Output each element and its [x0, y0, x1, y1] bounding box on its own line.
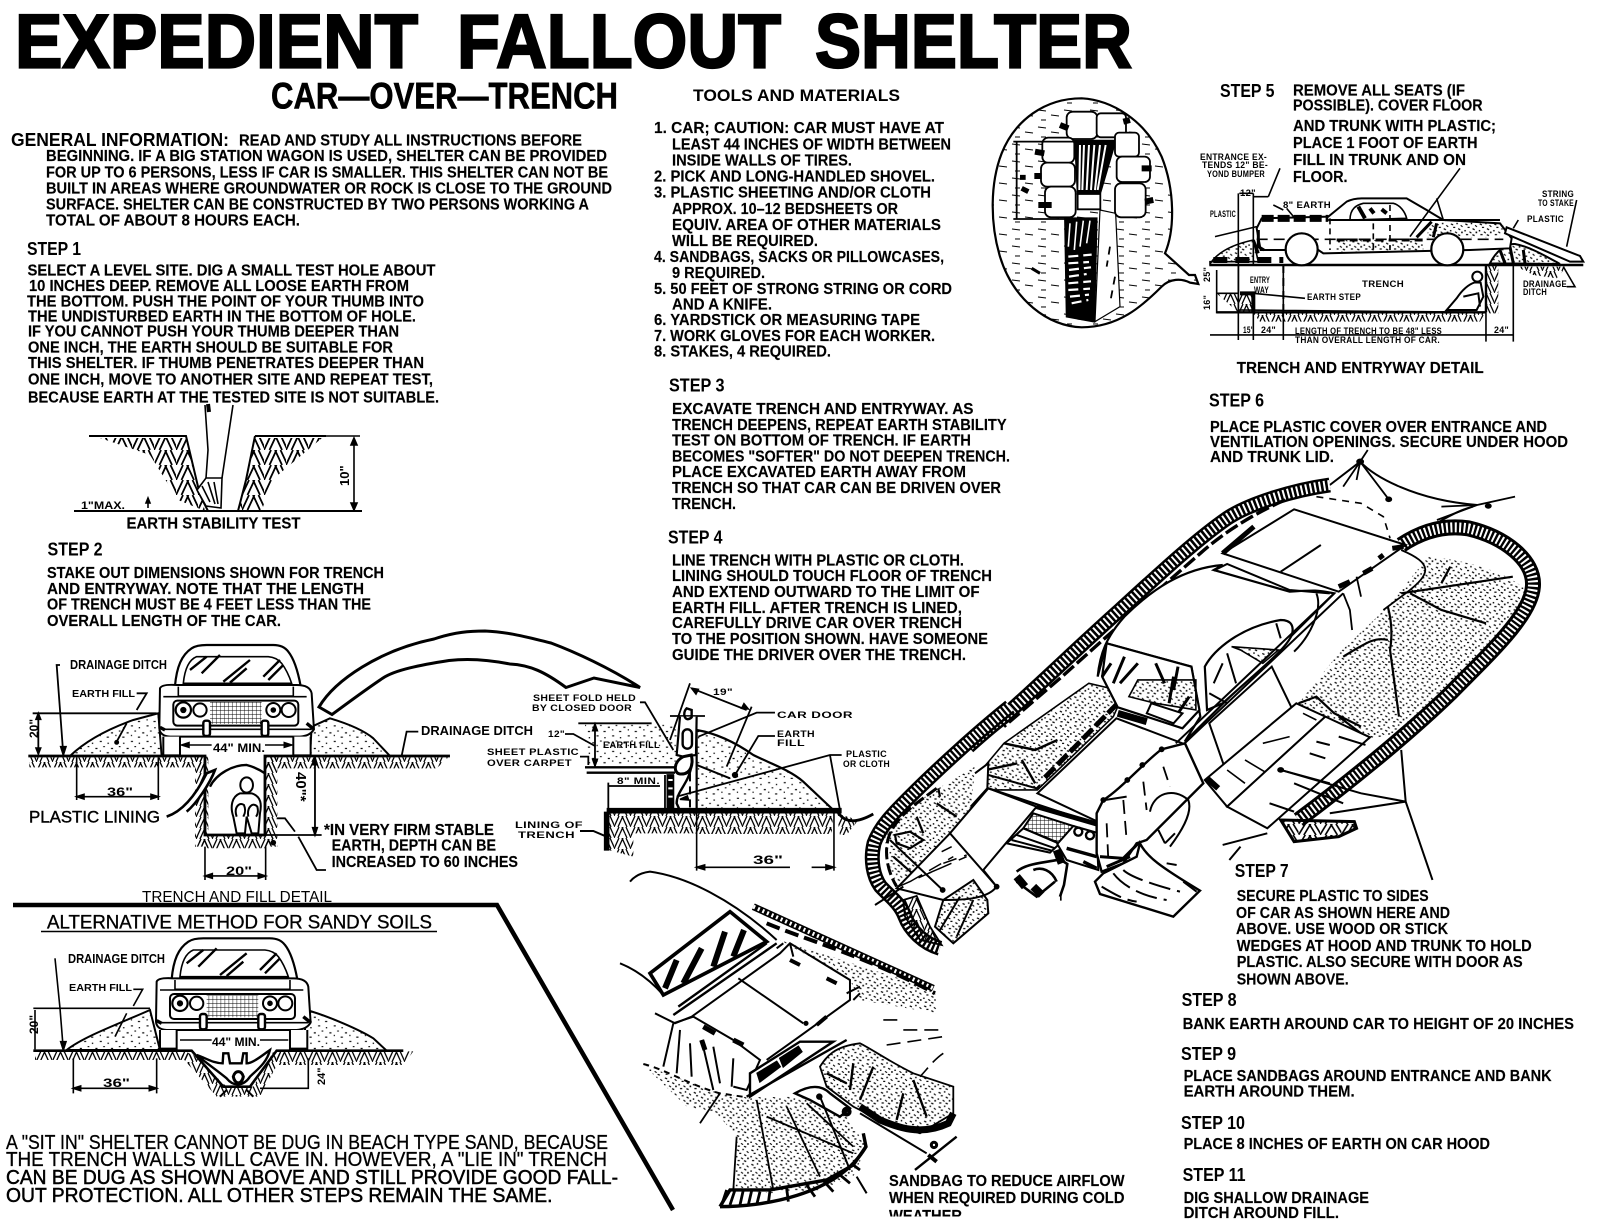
step 4 text: LINING SHOULD TOUCH FLOOR OF TRENCH: [672, 568, 992, 585]
tools and materials list: APPROX. 10–12 BEDSHEETS OR: [672, 201, 898, 218]
car roof: [1098, 564, 1334, 742]
steps 8 to 11 text: STEP 11: [1183, 1165, 1246, 1185]
diagram: earth stability test: 1"MAX.: [81, 500, 125, 512]
diagram: trench and fill detail: [27, 645, 533, 880]
alternative method heading: ALTERNATIVE METHOD FOR SANDY SOILS: [47, 913, 432, 934]
general information text: FOR UP TO 6 PERSONS, LESS IF CAR IS SMALLER. THIS SHELTER CAN NOT BE: [46, 164, 608, 182]
step 4 text: LINE TRENCH WITH PLASTIC OR CLOTH.: [672, 552, 964, 569]
car hood: [1037, 718, 1182, 822]
caption: sandbag note: [880, 1173, 1125, 1225]
diagram: trench and entryway detail: TO STAKE: [1538, 198, 1574, 208]
diagram: earth stability test: 10": [337, 465, 352, 486]
diagram: lie-in trench for sandy soils: DRAINAGE DITCH: [68, 951, 165, 966]
diagram: trench and entryway detail: YOND BUMPER: [1207, 169, 1265, 179]
step 3 text: PLACE EXCAVATED EARTH AWAY FROM: [672, 464, 966, 481]
step 5 text: FLOOR.: [1293, 169, 1348, 186]
diagram: trench and fill detail: DRAINAGE DITCH: [70, 657, 167, 672]
diagram: trench and fill detail: 20": [226, 864, 252, 878]
step 3 text: BECOMES "SOFTER" DO NOT DEEPEN TRENCH.: [672, 448, 1010, 465]
earth cliff at hood front: [988, 775, 1040, 788]
step 7 text: SHOWN ABOVE.: [1237, 972, 1349, 989]
diagram: lie-in trench for sandy soils: 24": [316, 1068, 328, 1085]
diagram: trench and entryway detail: TENDS 12" BE-: [1202, 160, 1268, 170]
steps 8 to 11 text: BANK EARTH AROUND CAR TO HEIGHT OF 20 INCHES: [1183, 1016, 1574, 1033]
tools and materials list: 5. 50 FEET OF STRONG STRING OR CORD: [654, 281, 952, 298]
plastic strip below hood: [897, 788, 1037, 900]
step 5 text: REMOVE ALL SEATS (IF: [1293, 83, 1465, 100]
tools and materials heading: TOOLS AND MATERIALS: [693, 86, 900, 105]
step 4 text: TO THE POSITION SHOWN. HAVE SOMEONE: [672, 631, 988, 648]
step 1 text: STEP 1: [27, 239, 81, 259]
diagram: lie-in trench for sandy soils: [27, 938, 413, 1097]
sandy soils explanatory text: THE TRENCH WALLS WILL CAVE IN. HOWEVER, A "LIE IN" TRENCH: [6, 1149, 607, 1171]
diagram: trench and fill detail: 40"*: [292, 772, 309, 802]
trunk lid: [1223, 509, 1406, 592]
step 5 text: [1220, 81, 1496, 186]
diagram: trench and entryway detail: PLASTIC: [1210, 209, 1236, 219]
diagram: trench and entryway detail: PLASTIC: [1527, 214, 1564, 224]
step 1 text: ONE INCH, THE EARTH SHOULD BE SUITABLE FOR: [28, 340, 393, 357]
caption: trench and fill detail: TRENCH AND FILL DETAIL: [142, 889, 332, 906]
car interior seats: [1102, 643, 1199, 728]
general information text: BEGINNING. IF A BIG STATION WAGON IS USED, SHELTER CAN BE PROVIDED: [46, 148, 607, 165]
step 1 text: [27, 239, 439, 406]
diagram: car door and earth fill detail: EARTH: [777, 729, 815, 739]
diagram: trench and entryway detail: EARTH STEP: [1307, 292, 1361, 302]
diagram: trench and entryway detail: 16": [1202, 295, 1212, 310]
right earth bank band: [1281, 527, 1533, 842]
diagram: car door and earth fill detail: 8" MIN.: [617, 776, 660, 786]
diagram: trench and entryway detail: LENGTH OF TRENCH TO BE 48" LESS: [1295, 326, 1442, 336]
step 3 text: [669, 376, 1010, 513]
step 7 text: OF CAR AS SHOWN HERE AND: [1236, 905, 1450, 922]
diagram: trench and fill detail: PLASTIC LINING: [29, 808, 160, 826]
diagram: main isometric car in shelter: [872, 450, 1533, 948]
grille: [1007, 813, 1098, 870]
diagram: car door and earth fill detail: 19": [713, 687, 733, 697]
step 2 text: [47, 540, 384, 630]
subtitle: CAR—OVER—TRENCH: [271, 76, 618, 116]
step 4 text: CAREFULLY DRIVE CAR OVER TRENCH: [672, 615, 962, 632]
sandy soils explanatory text: [6, 1132, 618, 1207]
steps 8 to 11 text: STEP 10: [1181, 1113, 1245, 1133]
step 5 text: POSSIBLE). COVER FLOOR: [1293, 98, 1483, 115]
caption: sandbag note: SANDBAG TO REDUCE AIRFLOW: [889, 1173, 1125, 1190]
left earth bank band: [968, 485, 1330, 747]
diagram: trench and entryway detail: ENTRANCE EX-: [1200, 152, 1267, 162]
step 6 text: PLACE PLASTIC COVER OVER ENTRANCE AND: [1210, 419, 1547, 436]
plastic sheet held by door: [1097, 743, 1203, 872]
sandy soils explanatory text: CAN BE DUG AS SHOWN ABOVE AND STILL PROVIDE GOOD FALL-: [6, 1167, 618, 1189]
title: EXPEDIENT: [15, 0, 418, 84]
tie cords and trunk wedges: [1223, 750, 1432, 880]
step 4 text: STEP 4: [668, 528, 722, 548]
general information text: [11, 130, 612, 229]
steps 8 to 11 text: [1181, 990, 1574, 1222]
tools and materials list: LEAST 44 INCHES OF WIDTH BETWEEN: [672, 136, 951, 154]
steps 8 to 11 text: STEP 9: [1181, 1044, 1236, 1064]
diagram: trench and entryway detail: WAY: [1254, 285, 1269, 295]
general information text: GENERAL INFORMATION:: [11, 130, 229, 150]
step 2 text: AND ENTRYWAY. NOTE THAT THE LENGTH: [47, 581, 364, 598]
step 3 text: STEP 3: [669, 376, 724, 396]
step 2 text: OF TRENCH MUST BE 4 FEET LESS THAN THE: [47, 597, 371, 614]
diagram: trench and fill detail: DRAINAGE DITCH: [421, 723, 533, 738]
general information text: BUILT IN AREAS WHERE GROUNDWATER OR ROCK IS CLOSE TO THE GROUND: [46, 181, 612, 198]
caption: sandbag note: WHEN REQUIRED DURING COLD: [889, 1190, 1124, 1207]
steps 8 to 11 text: DIG SHALLOW DRAINAGE: [1184, 1190, 1369, 1207]
plastic flap near trunk: [1343, 550, 1425, 630]
earth fill, hood band: [982, 683, 1124, 790]
step 1 text: ONE INCH, MOVE TO ANOTHER SITE AND REPEAT TEST,: [28, 372, 433, 389]
lower front of car, banks, sheet and worker: [872, 707, 1203, 948]
sandy soils explanatory text: OUT PROTECTION. ALL OTHER STEPS REMAIN THE SAME.: [6, 1185, 552, 1207]
step 4 text: EARTH FILL. AFTER TRENCH IS LINED,: [672, 600, 962, 617]
steps 8 to 11 text: PLACE 8 INCHES OF EARTH ON CAR HOOD: [1184, 1136, 1490, 1153]
diagram: sandbag entrance detail bubble: [993, 98, 1198, 327]
diagram: lie-in trench for sandy soils: EARTH FILL: [69, 983, 132, 994]
steps 8 to 11 text: DITCH AROUND FILL.: [1184, 1205, 1339, 1222]
step 7 text: STEP 7: [1235, 861, 1289, 881]
diagram: earth stability test: [74, 404, 362, 512]
diagram: lie-in trench for sandy soils: 20": [27, 1015, 41, 1034]
diagram: car door and earth fill detail: EARTH FILL: [603, 740, 660, 750]
door and side panel: [1205, 667, 1325, 807]
step 5 text: PLACE 1 FOOT OF EARTH: [1293, 135, 1478, 152]
diagram: car door and earth fill detail: OR CLOTH: [843, 759, 890, 769]
tip of bank: [903, 880, 988, 945]
tools and materials list: WILL BE REQUIRED.: [672, 233, 818, 250]
step 7 text: [1235, 861, 1532, 989]
step 4 text: [668, 528, 992, 664]
step 4 text: GUIDE THE DRIVER OVER THE TRENCH.: [672, 647, 966, 664]
step 6 text: [1209, 390, 1568, 466]
diagram: car door and earth fill detail: FILL: [777, 738, 805, 748]
diagram: trench and entryway detail: 8" EARTH: [1283, 200, 1331, 210]
caption: earth stability test: EARTH STABILITY TEST: [126, 516, 301, 533]
step 6 text: VENTILATION OPENINGS. SECURE UNDER HOOD: [1210, 434, 1568, 451]
plastic cover at trunk: [1294, 450, 1515, 545]
diagram: trench and entryway detail: TRENCH: [1362, 279, 1404, 289]
diagram: trench and entryway detail: 15": [1243, 325, 1254, 335]
diagram: car door and earth fill detail: LINING OF: [515, 820, 583, 830]
open cab window: [1205, 620, 1293, 710]
step 7 text: ABOVE. USE WOOD OR STICK: [1236, 921, 1448, 938]
car side line: [1176, 593, 1343, 743]
tools and materials list: 2. PICK AND LONG-HANDLED SHOVEL.: [654, 168, 935, 186]
step 3 text: TRENCH DEEPENS, REPEAT EARTH STABILITY: [672, 417, 1007, 434]
tools and materials list: AND A KNIFE.: [672, 297, 772, 314]
step 2 text: OVERALL LENGTH OF THE CAR.: [47, 613, 281, 630]
general information text: SURFACE. SHELTER CAN BE CONSTRUCTED BY TWO PERSONS WORKING A: [46, 197, 589, 214]
general information text: READ AND STUDY ALL INSTRUCTIONS BEFORE: [239, 132, 582, 150]
diagram: car door and earth fill detail: 12": [548, 729, 565, 739]
general information text: TOTAL OF ABOUT 8 HOURS EACH.: [46, 212, 300, 229]
step 7 text: WEDGES AT HOOD AND TRUNK TO HOLD: [1237, 938, 1532, 955]
tools and materials list: 3. PLASTIC SHEETING AND/OR CLOTH: [654, 185, 931, 202]
title: FALLOUT: [457, 0, 781, 84]
diagram: car door and earth fill detail: SHEET PLASTIC: [487, 747, 579, 757]
diagram: car door and earth fill detail: SHEET FOLD HELD: [533, 693, 636, 703]
step 1 text: SELECT A LEVEL SITE. DIG A SMALL TEST HOLE ABOUT: [28, 263, 436, 280]
tools and materials list: 1. CAR; CAUTION: CAR MUST HAVE AT: [654, 120, 944, 137]
steps 8 to 11 text: EARTH AROUND THEM.: [1184, 1084, 1355, 1100]
diagram: lie-in trench for sandy soils: 36": [103, 1076, 130, 1090]
step 6 text: AND TRUNK LID.: [1210, 449, 1334, 466]
step 2 text: STEP 2: [48, 540, 102, 560]
cord dots: [875, 833, 999, 905]
step 1 text: 10 INCHES DEEP. REMOVE ALL LOOSE EARTH FROM: [29, 278, 409, 295]
step 3 text: TEST ON BOTTOM OF TRENCH. IF EARTH: [672, 433, 971, 450]
step 1 text: IF YOU CANNOT PUSH YOUR THUMB DEEPER THAN: [28, 324, 399, 340]
diagram: trench and fill detail: 20": [27, 719, 41, 738]
earth fill, right bank: [1299, 557, 1526, 740]
diagram: trench and entryway detail: DRAINAGE: [1523, 279, 1567, 289]
diagram: car door and earth fill detail: TRENCH: [518, 830, 575, 840]
diagram: trench and entryway detail: ENTRY: [1250, 275, 1270, 285]
title: [15, 0, 1132, 84]
note: depth in firm earth: [324, 822, 518, 871]
caption: sandbag note: WEATHER: [889, 1208, 962, 1225]
diagram: car door and earth fill detail: BY CLOSED DOOR: [532, 703, 632, 713]
step 7 text: PLASTIC. ALSO SECURE WITH DOOR AS: [1237, 954, 1523, 971]
ground sheet right: [1227, 717, 1370, 828]
left bank stipple: [883, 767, 975, 887]
step 3 text: EXCAVATE TRENCH AND ENTRYWAY. AS: [672, 401, 974, 418]
step 1 text: THIS SHELTER. IF THUMB PENETRATES DEEPER THAN: [28, 355, 424, 372]
front edge of hood: [988, 788, 1097, 824]
tools and materials list: [654, 120, 952, 361]
diagram: car door and earth fill detail: [487, 683, 890, 871]
diagram: trench and entryway detail: 24": [1261, 325, 1276, 335]
diagram: car door and earth fill detail: CAR DOOR: [777, 710, 853, 720]
step 1 text: THE UNDISTURBED EARTH IN THE BOTTOM OF HOLE.: [28, 308, 416, 326]
diagram: trench and entryway detail: DITCH: [1523, 287, 1547, 297]
diagram: trench and entryway detail: STRING: [1542, 189, 1574, 199]
step 1 text: BECAUSE EARTH AT THE TESTED SITE IS NOT SUITABLE.: [28, 390, 439, 406]
wedges along trunk edge: [1223, 527, 1403, 587]
tools and materials list: 7. WORK GLOVES FOR EACH WORKER.: [654, 328, 935, 345]
diagram: trench and fill detail: EARTH FILL: [72, 689, 135, 700]
tools and materials list: 8. STAKES, 4 REQUIRED.: [654, 344, 831, 361]
diagram: car door and earth fill detail: 36": [753, 853, 783, 867]
diagram: car door and earth fill detail: PLASTIC: [846, 749, 887, 759]
tools and materials list: 4. SANDBAGS, SACKS OR PILLOWCASES,: [654, 249, 944, 266]
tools and materials list: INSIDE WALLS OF TIRES.: [672, 152, 852, 169]
worker figure: [1017, 850, 1067, 897]
left bank rope band continuing round the tip: [872, 707, 1010, 948]
curved arrow from trench diagram to door detail: [319, 631, 640, 714]
note: depth in firm earth: INCREASED TO 60 INCHES: [332, 854, 518, 871]
caption: trench and entryway detail: TRENCH AND ENTRYWAY DETAIL: [1237, 360, 1484, 377]
diagram: trench and fill detail: 36": [107, 785, 133, 799]
diagram: lie-in trench for sandy soils: 44" MIN.: [212, 1035, 260, 1049]
diagram: trench and entryway detail: 25": [1202, 267, 1212, 282]
note: depth in firm earth: EARTH, DEPTH CAN BE: [332, 838, 496, 855]
step 4 text: AND EXTEND OUTWARD TO THE LIMIT OF: [672, 584, 980, 601]
tools and materials list: EQUIV. AREA OF OTHER MATERIALS: [672, 217, 941, 234]
diagram: trench and fill detail: 44" MIN.: [213, 741, 265, 755]
step 5 text: STEP 5: [1220, 81, 1274, 101]
ground sheet at door: [1095, 843, 1200, 917]
steps 8 to 11 text: STEP 8: [1182, 990, 1237, 1010]
curved plastic at hood corner: [971, 763, 988, 807]
steps 8 to 11 text: PLACE SANDBAGS AROUND ENTRANCE AND BANK: [1184, 1068, 1552, 1085]
step 5 text: AND TRUNK WITH PLASTIC;: [1293, 118, 1496, 135]
tools and materials list: 9 REQUIRED.: [672, 265, 765, 282]
step 3 text: TRENCH.: [672, 496, 736, 513]
diagram: trench and entryway detail: THAN OVERALL LENGTH OF CAR.: [1295, 335, 1440, 345]
tie knots: [1037, 807, 1097, 824]
tools and materials list: 6. YARDSTICK OR MEASURING TAPE: [654, 312, 920, 329]
step 5 text: FILL IN TRUNK AND ON: [1293, 152, 1466, 169]
title: SHELTER: [815, 0, 1132, 84]
step 6 text: STEP 6: [1209, 390, 1264, 410]
step 7 text: SECURE PLASTIC TO SIDES: [1237, 888, 1429, 905]
step 1 text: THE BOTTOM. PUSH THE POINT OF YOUR THUMB INTO: [27, 293, 424, 310]
step 3 text: TRENCH SO THAT CAR CAN BE DRIVEN OVER: [672, 480, 1001, 497]
diagram: front view of car with sandbagged entrance: [620, 872, 957, 1207]
panel border: alternative method: [13, 905, 673, 1210]
note: depth in firm earth: *IN VERY FIRM STABLE: [324, 822, 494, 839]
step 2 text: STAKE OUT DIMENSIONS SHOWN FOR TRENCH: [47, 565, 384, 582]
diagram: trench and entryway detail: 12": [1240, 188, 1256, 198]
diagram: trench and entryway detail: 24": [1494, 325, 1509, 335]
diagram: car door and earth fill detail: OVER CARPET: [487, 758, 572, 768]
diagram: trench and entryway detail: [1200, 152, 1583, 345]
sandy soils explanatory text: A "SIT IN" SHELTER CANNOT BE DUG IN BEACH TYPE SAND, BECAUSE: [6, 1132, 608, 1154]
